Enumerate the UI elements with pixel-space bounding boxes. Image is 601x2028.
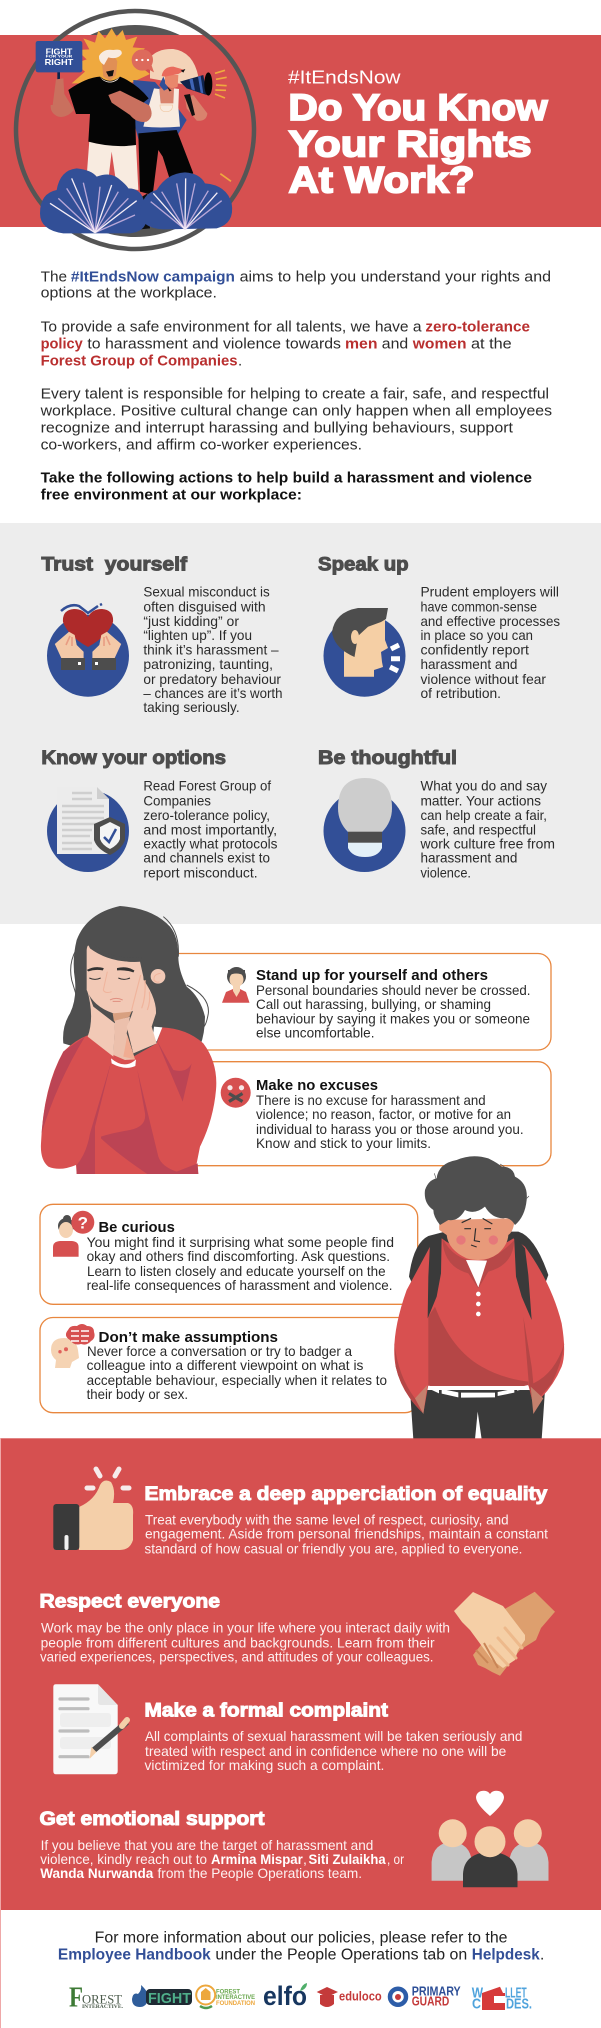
logo: Primary Guard: GUARD [412, 1994, 449, 2008]
text: trust yourself: “lighten up”. If you [143, 627, 252, 643]
header title [288, 87, 548, 201]
intro paragraph 2: men [345, 336, 378, 353]
text: don't make assumptions: Never force a conversation or try to badger a [87, 1343, 352, 1359]
logo: eduloco [317, 1987, 382, 2007]
logo: Primary Guard [390, 1985, 461, 2008]
text: know your options: report misconduct. [143, 865, 258, 881]
text: be curious: Be curious [98, 1219, 175, 1236]
text: know your options [143, 778, 278, 881]
text: speak up: of retribution. [420, 685, 501, 701]
intro paragraph 3 [40, 386, 552, 453]
text: trust yourself: “just kidding” or [143, 613, 239, 629]
text: speak up: confidently report [420, 642, 529, 658]
text: make no excuses: violence; no reason, factor, or motive for an [256, 1106, 511, 1122]
heading: embrace equality: Embrace a deep apperciation of equality [144, 1484, 548, 1505]
text: trust yourself: or predatory behaviour [143, 671, 281, 687]
text: speak up: in place so you can [420, 627, 533, 643]
text: get emotional support: If you believe that you are the target of harassment and [41, 1837, 373, 1853]
text: respect everyone: Work may be the only place in your life where you interact daily with [41, 1619, 450, 1635]
text: be thoughtful: harassment and [420, 850, 517, 866]
logo: Wallet Codes [472, 1984, 532, 2012]
intro paragraph 1 [41, 269, 551, 302]
text: speak up: have common-sense [420, 599, 537, 615]
text: make no excuses: Know and stick to your limits. [256, 1135, 431, 1151]
intro paragraph 2: To provide a safe environment for all talents, we have a [41, 319, 422, 336]
callout: don't make assumptions [40, 1318, 418, 1413]
logo: Wallet Codes: C [472, 1996, 481, 2012]
heading: respect everyone: Respect everyone [40, 1592, 220, 1613]
intro paragraph 2: at the [471, 336, 512, 353]
footer note: under the People Operations tab on [215, 1947, 467, 1964]
intro paragraph 3: recognize and interrupt harassing and bullying behaviours, support [41, 420, 514, 437]
logo: Forest Interactive Foundation: FOREST [216, 1988, 240, 1995]
icon: thumbs up [53, 1469, 133, 1550]
intro paragraph 2: Forest Group of Companies [41, 352, 238, 369]
intro paragraph 2: . [238, 352, 242, 369]
text: don't make assumptions: Don’t make assumptions [98, 1329, 278, 1346]
intro paragraph 3: Every talent is responsible for helping to create a fair, safe, and respectful [41, 386, 549, 403]
text: stand up [256, 967, 530, 1041]
intro paragraph 1: aims to help you understand your rights and [240, 269, 551, 286]
text: stand up: else uncomfortable. [256, 1025, 374, 1041]
intro call to action [41, 470, 532, 503]
text: stand up: behaviour by saying it makes you or someone [256, 1010, 530, 1026]
panel: red guidance section [0, 1438, 601, 1910]
text: get emotional support: Armina Mispar [211, 1851, 303, 1867]
logo: Forest Interactive Foundation [196, 1986, 256, 2008]
icon: woman with question mark: ? [78, 1214, 88, 1232]
heading: make a formal complaint: Make a formal complaint [144, 1701, 389, 1722]
text: know your options: Read Forest Group of [143, 778, 271, 794]
text: don't make assumptions [87, 1329, 387, 1402]
header illustration: protesters with sign and megaphone [36, 28, 232, 233]
header title: Your Rights [288, 124, 532, 165]
heading: trust yourself: Trust yourself [41, 555, 188, 576]
text: be thoughtful: violence. [420, 865, 471, 881]
text: don't make assumptions: their body or sex. [87, 1386, 188, 1402]
intro paragraph 2: zero-tolerance [425, 319, 530, 336]
text: embrace equality [144, 1511, 548, 1556]
text: stand up: Call out harassing, bullying, or shaming [256, 996, 491, 1012]
text: make no excuses: Make no excuses [256, 1077, 378, 1094]
text: know your options: and channels exist to [143, 850, 270, 866]
text: be thoughtful [420, 778, 555, 881]
intro text [40, 269, 552, 503]
logo: Forest Interactive Foundation: INTERACTIVE [216, 1994, 256, 2001]
logo: Primary Guard: PRIMARY [412, 1985, 461, 1999]
header title: At Work? [288, 160, 474, 201]
text: speak up [420, 584, 560, 701]
intro paragraph 2: women [412, 336, 466, 353]
logo: Wallet Codes: LLET [505, 1984, 527, 2002]
text: trust yourself: patronizing, taunting, [143, 656, 273, 672]
text: be thoughtful: can help create a fair, [420, 807, 547, 823]
text: embrace equality: standard of how casual or friendly you are, applied to everyone. [144, 1540, 522, 1556]
text: trust yourself: often disguised with [143, 599, 266, 615]
logo: elfo: elfo [263, 1981, 307, 2011]
callout: make no excuses [150, 1062, 551, 1166]
text: trust yourself: – chances are it’s worth [143, 685, 282, 701]
header illustration: protesters with sign and megaphone: RIGHT [45, 57, 73, 67]
intro paragraph 3: workplace. Positive cultural change can only happen when all employees [40, 403, 552, 420]
text: be curious: You might find it surprising what some people find [87, 1234, 394, 1250]
logo: Forest Interactive: F [69, 1982, 83, 2014]
text: know your options: exactly what protocols [143, 836, 278, 852]
logo: Fight: FIGHT [148, 1990, 191, 2007]
text: stand up: Stand up for yourself and others [256, 967, 488, 984]
logo: Forest Interactive Foundation: FOUNDATION [216, 2000, 255, 2007]
heading: know your options: Know your options [41, 748, 226, 769]
text: respect everyone [40, 1619, 450, 1664]
text: be thoughtful: What you do and say [420, 778, 547, 794]
text: get emotional support: violence, kindly reach out to [40, 1851, 207, 1867]
text: trust yourself [143, 584, 282, 715]
text: make no excuses: There is no excuse for harassment and [256, 1092, 486, 1108]
icon: speaking head [324, 608, 406, 697]
intro paragraph 1: #ItEndsNow campaign [71, 269, 235, 286]
footer note: For more information about our policies, please refer to the [95, 1930, 507, 1947]
header illustration: protesters with sign and megaphone: FIGHT [46, 46, 72, 56]
text: get emotional support: Siti Zulaikha [308, 1851, 386, 1867]
icon: complaint document and pencil [53, 1684, 127, 1774]
callout: stand up for yourself and others [150, 954, 551, 1050]
text: get emotional support: , [303, 1851, 307, 1867]
text: make a formal complaint: All complaints of sexual harassment will be taken seriously and [145, 1728, 522, 1744]
text: trust yourself: think it’s harassment – [143, 642, 279, 658]
logo: eduloco: eduloco [339, 1988, 382, 2004]
text: get emotional support: Wanda Nurwanda [40, 1865, 154, 1881]
text: respect everyone: people from different cultures and backgrounds. Learn from their [41, 1634, 435, 1650]
intro paragraph 2: to harassment and violence towards [87, 336, 341, 353]
intro paragraph 2 [41, 319, 530, 369]
icon: light bulb [324, 778, 406, 872]
callout: be curious [40, 1204, 418, 1304]
text: get emotional support: , or [387, 1851, 404, 1867]
text: speak up: violence without fear [420, 671, 546, 687]
text: be thoughtful: matter. Your actions [420, 793, 541, 809]
text: be curious: okay and others find discomforting. Ask questions. [87, 1248, 390, 1264]
logo: Wallet Codes: DES. [506, 1996, 532, 2012]
icon: policy document with shield [47, 787, 129, 872]
text: know your options: and most importantly, [143, 822, 277, 838]
icon: three people with heart [432, 1791, 548, 1887]
text: speak up: Prudent employers will [420, 584, 559, 600]
panel: four actions [0, 523, 601, 924]
text: speak up: harassment and [420, 656, 517, 672]
text: trust yourself: taking seriously. [143, 699, 240, 715]
header title: Do You Know [288, 87, 548, 128]
intro paragraph 3: co-workers, and affirm co-worker experiences. [41, 436, 362, 453]
intro call to action: Take the following actions to help build a harassment and violence [41, 470, 532, 487]
text: respect everyone: varied experiences, perspectives, and attitudes of your colleagues. [40, 1648, 434, 1664]
logo: Fight [132, 1985, 192, 2007]
logo: Forest Interactive: OREST [82, 1992, 122, 2006]
header hashtag: #ItEndsNow [288, 67, 402, 87]
text: stand up: Personal boundaries should never be crossed. [256, 982, 530, 998]
icon: heart in hands [47, 604, 129, 697]
text: make no excuses: individual to harass you or those around you. [256, 1121, 524, 1137]
intro paragraph 2: policy [41, 336, 83, 353]
text: make a formal complaint: treated with respect and in confidence where no one will be [145, 1743, 507, 1759]
text: embrace equality: Treat everybody with the same level of respect, curiosity, and [145, 1511, 509, 1527]
icon: handshake [454, 1592, 555, 1676]
footer note [58, 1930, 544, 1964]
intro paragraph 1: The [41, 269, 67, 286]
text: make a formal complaint [144, 1728, 522, 1773]
text: be thoughtful: safe, and respectful [420, 822, 536, 838]
logos row [69, 1981, 532, 2014]
footer note: Helpdesk [472, 1947, 540, 1964]
text: be curious: Learn to listen closely and educate yourself on the [87, 1263, 386, 1279]
icon: woman with question mark [53, 1211, 94, 1257]
text: be curious [87, 1219, 394, 1293]
icon: person [222, 967, 250, 1003]
footer note: . [540, 1947, 544, 1964]
heading: get emotional support: Get emotional support [40, 1809, 265, 1830]
illustration: sad man with backpack [394, 1156, 564, 1439]
icon: head with thought cloud [51, 1324, 95, 1368]
logo: Wallet Codes: W [472, 1984, 484, 2002]
icon: silenced face [221, 1078, 251, 1108]
logo: Forest Interactive: INTERACTIVE. [82, 2004, 124, 2010]
text: speak up: and effective processes [420, 613, 560, 629]
intro call to action: free environment at our workplace: [41, 486, 302, 503]
heading: be thoughtful: Be thoughtful [318, 748, 457, 769]
text: make a formal complaint: victimized for making such a complaint. [144, 1757, 384, 1773]
text: don't make assumptions: colleague into a different viewpoint on what is [87, 1357, 363, 1373]
footer note: Employee Handbook [58, 1947, 211, 1964]
text: be curious: real-life consequences of harassment and violence. [87, 1277, 392, 1293]
logo: Forest Interactive [69, 1982, 124, 2014]
illustration: stressed woman [41, 906, 216, 1174]
text: know your options: Companies [143, 793, 211, 809]
heading: speak up: Speak up [318, 555, 409, 576]
text: know your options: zero-tolerance policy, [143, 807, 270, 823]
text: get emotional support [40, 1837, 404, 1881]
text: don't make assumptions: acceptable behaviour, especially when it relates to [87, 1372, 387, 1388]
text: trust yourself: Sexual misconduct is [143, 584, 270, 600]
text: be thoughtful: work culture free from [420, 836, 555, 852]
text: embrace equality: engagement. Aside from personal friendships, maintain a constant [145, 1525, 548, 1541]
intro paragraph 2: and [382, 336, 408, 353]
header illustration: protesters with sign and megaphone: FOR YOUR [46, 55, 73, 59]
header banner [0, 11, 601, 249]
intro paragraph 1: options at the workplace. [41, 285, 217, 302]
text: make no excuses [256, 1077, 524, 1151]
text: get emotional support: from the People Operations team. [158, 1865, 362, 1881]
